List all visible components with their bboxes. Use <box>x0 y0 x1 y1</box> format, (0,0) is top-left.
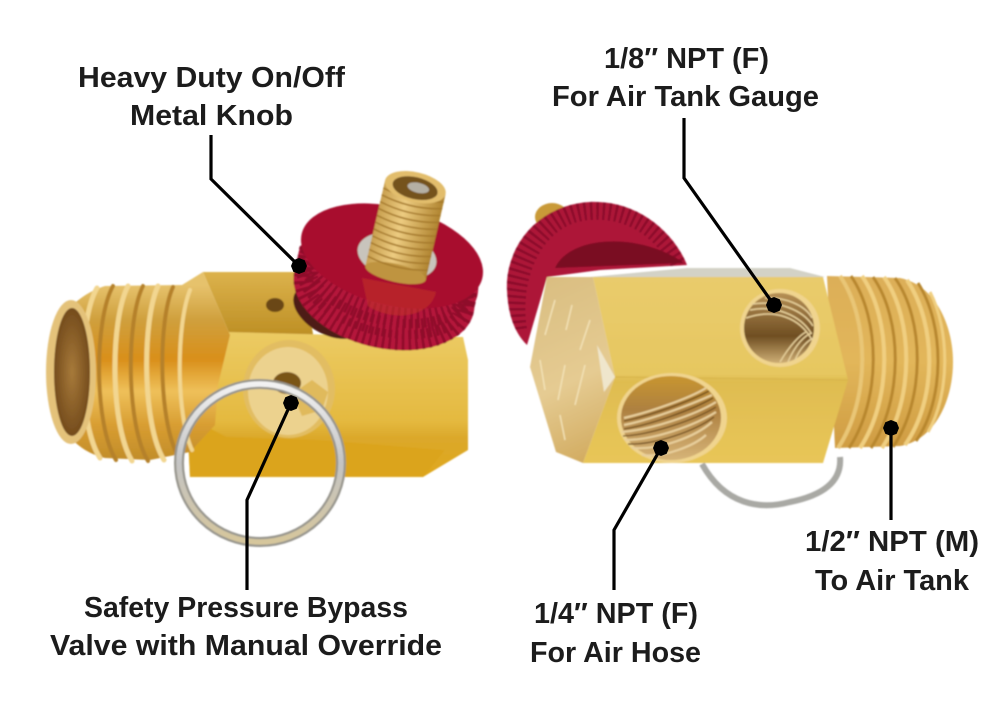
threaded stem <box>363 166 449 289</box>
callout: gauge port leader <box>684 118 782 313</box>
label: air tank thread: To Air Tank <box>815 565 970 597</box>
knob underside shadow <box>284 274 372 350</box>
left fitting body front face <box>187 332 468 477</box>
callout: air hose port leader <box>614 440 669 590</box>
knob washer <box>353 225 441 287</box>
lower threaded port <box>617 373 727 463</box>
left fitting bore <box>46 300 96 444</box>
label: safety bypass valve <box>50 592 442 662</box>
hex end face <box>530 277 615 463</box>
lanyard ring <box>702 457 840 505</box>
key ring <box>179 384 341 542</box>
body top highlight <box>590 268 825 277</box>
red knob <box>282 186 494 367</box>
left fitting threaded end <box>46 272 230 461</box>
right fitting thread <box>827 276 953 448</box>
label: safety bypass valve: Valve with Manual Override <box>50 630 442 662</box>
left fitting body top face <box>203 272 315 345</box>
label: metal knob: Metal Knob <box>130 100 293 132</box>
body bevel <box>615 377 848 380</box>
knob top <box>290 186 494 326</box>
label: metal knob: Heavy Duty On/Off <box>78 62 345 94</box>
pressure valve seat <box>243 340 335 438</box>
left valve fitting <box>46 166 494 542</box>
bottom bevel shading <box>187 417 445 477</box>
small vent hole <box>266 298 284 312</box>
callout: bypass valve leader <box>247 395 299 590</box>
label: air hose port: For Air Hose <box>530 637 701 669</box>
facet glint <box>597 345 615 392</box>
label: air tank gauge port <box>552 43 819 113</box>
knob ridges <box>294 210 478 355</box>
callout: metal knob leader <box>211 135 307 274</box>
label: air hose port <box>530 598 701 669</box>
upper threaded port <box>740 289 820 367</box>
right valve fitting <box>507 202 953 505</box>
label: air tank thread: 1/2″ NPT (M) <box>805 526 979 558</box>
knob side solid <box>282 217 486 367</box>
right fitting body <box>583 277 848 463</box>
stamped markings <box>540 300 590 440</box>
red knob rear <box>507 202 687 345</box>
callout: tank thread leader <box>883 420 899 520</box>
label: air tank thread <box>805 526 979 597</box>
label: metal knob <box>78 62 345 132</box>
label: air tank gauge port: For Air Tank Gauge <box>552 81 819 113</box>
label: air tank gauge port: 1/8″ NPT (F) <box>604 43 769 75</box>
label: safety bypass valve: Safety Pressure Bypass <box>84 592 408 624</box>
label: air hose port: 1/4″ NPT (F) <box>534 598 698 630</box>
knob sleeve reflection <box>362 278 436 315</box>
